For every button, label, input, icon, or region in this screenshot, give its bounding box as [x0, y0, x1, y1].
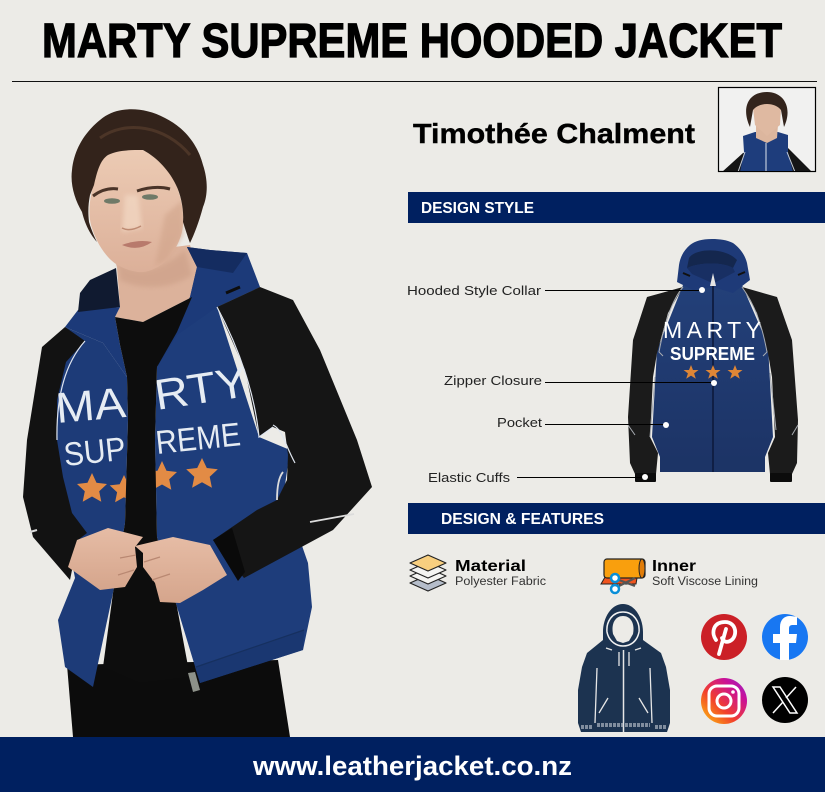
callout: pocket [497, 415, 669, 430]
jacket right front panel [155, 247, 312, 683]
material text: Polyester Fabric [455, 576, 546, 588]
callout: elastic cuffs [428, 470, 648, 485]
elastic cuff [213, 528, 245, 581]
neck [113, 245, 197, 322]
material text: Material [455, 558, 526, 575]
callout: pocket: Pocket [497, 415, 542, 430]
print: MARTY: MARTY [663, 317, 761, 343]
trousers [67, 660, 290, 737]
piping [217, 307, 295, 463]
inner text: Inner [652, 558, 696, 575]
jacket left front panel [50, 327, 128, 687]
print: SUPREME: SUPREME [670, 344, 755, 364]
section bar: design style [408, 192, 825, 223]
icon: inner fabric roll and scissors [601, 559, 645, 593]
callout: zipper closure [444, 373, 717, 388]
callout: hooded style collar [407, 283, 705, 298]
icon: hoodie [578, 604, 670, 732]
face [89, 149, 183, 272]
icon: pinterest [701, 614, 747, 660]
icon: instagram [701, 678, 747, 724]
callout: zipper closure: Zipper Closure [444, 373, 542, 388]
jacket diagram [628, 239, 798, 482]
material text [455, 558, 546, 588]
section bar: design style: DESIGN STYLE [421, 200, 534, 217]
hem band [195, 630, 304, 683]
stars [684, 365, 742, 379]
callout: hooded style collar: Hooded Style Collar [407, 283, 542, 298]
inner text: Soft Viscose Lining [652, 576, 758, 588]
hood left side [65, 307, 127, 377]
zipper [712, 278, 714, 472]
name heading: Timothée Chalment [413, 118, 695, 149]
icon: x [762, 677, 808, 723]
left black sleeve [23, 327, 87, 580]
jacket print text: SUP [62, 430, 127, 473]
cuffs [635, 473, 656, 482]
jacket print text: REME [154, 415, 242, 461]
callout: elastic cuffs: Elastic Cuffs [428, 470, 511, 485]
hair [72, 109, 207, 243]
piping [628, 287, 798, 437]
model photo illustration [23, 109, 372, 737]
body [652, 285, 773, 472]
jacket print text [54, 358, 250, 473]
jacket print text: MA [54, 379, 128, 433]
hands [68, 528, 143, 590]
t-shirt [103, 297, 192, 683]
zipper pull [188, 672, 200, 692]
footer bar: www.leatherjacket.co.nz [252, 751, 572, 781]
print stars [77, 458, 218, 502]
hood [677, 239, 750, 293]
hood right side [157, 247, 260, 367]
icon: material layers [410, 555, 446, 591]
eyebrows, eyes, nose, mouth [93, 187, 170, 196]
jacket print text: RTY [151, 358, 250, 420]
section bar: design and features: DESIGN & FEATURES [441, 511, 604, 528]
footer bar [0, 737, 825, 792]
portrait thumbnail [718, 88, 816, 172]
section bar: design and features [408, 503, 825, 534]
icon: facebook [762, 614, 808, 660]
inner text [652, 558, 758, 588]
right black sleeve [213, 287, 372, 578]
sleeves [628, 287, 683, 474]
